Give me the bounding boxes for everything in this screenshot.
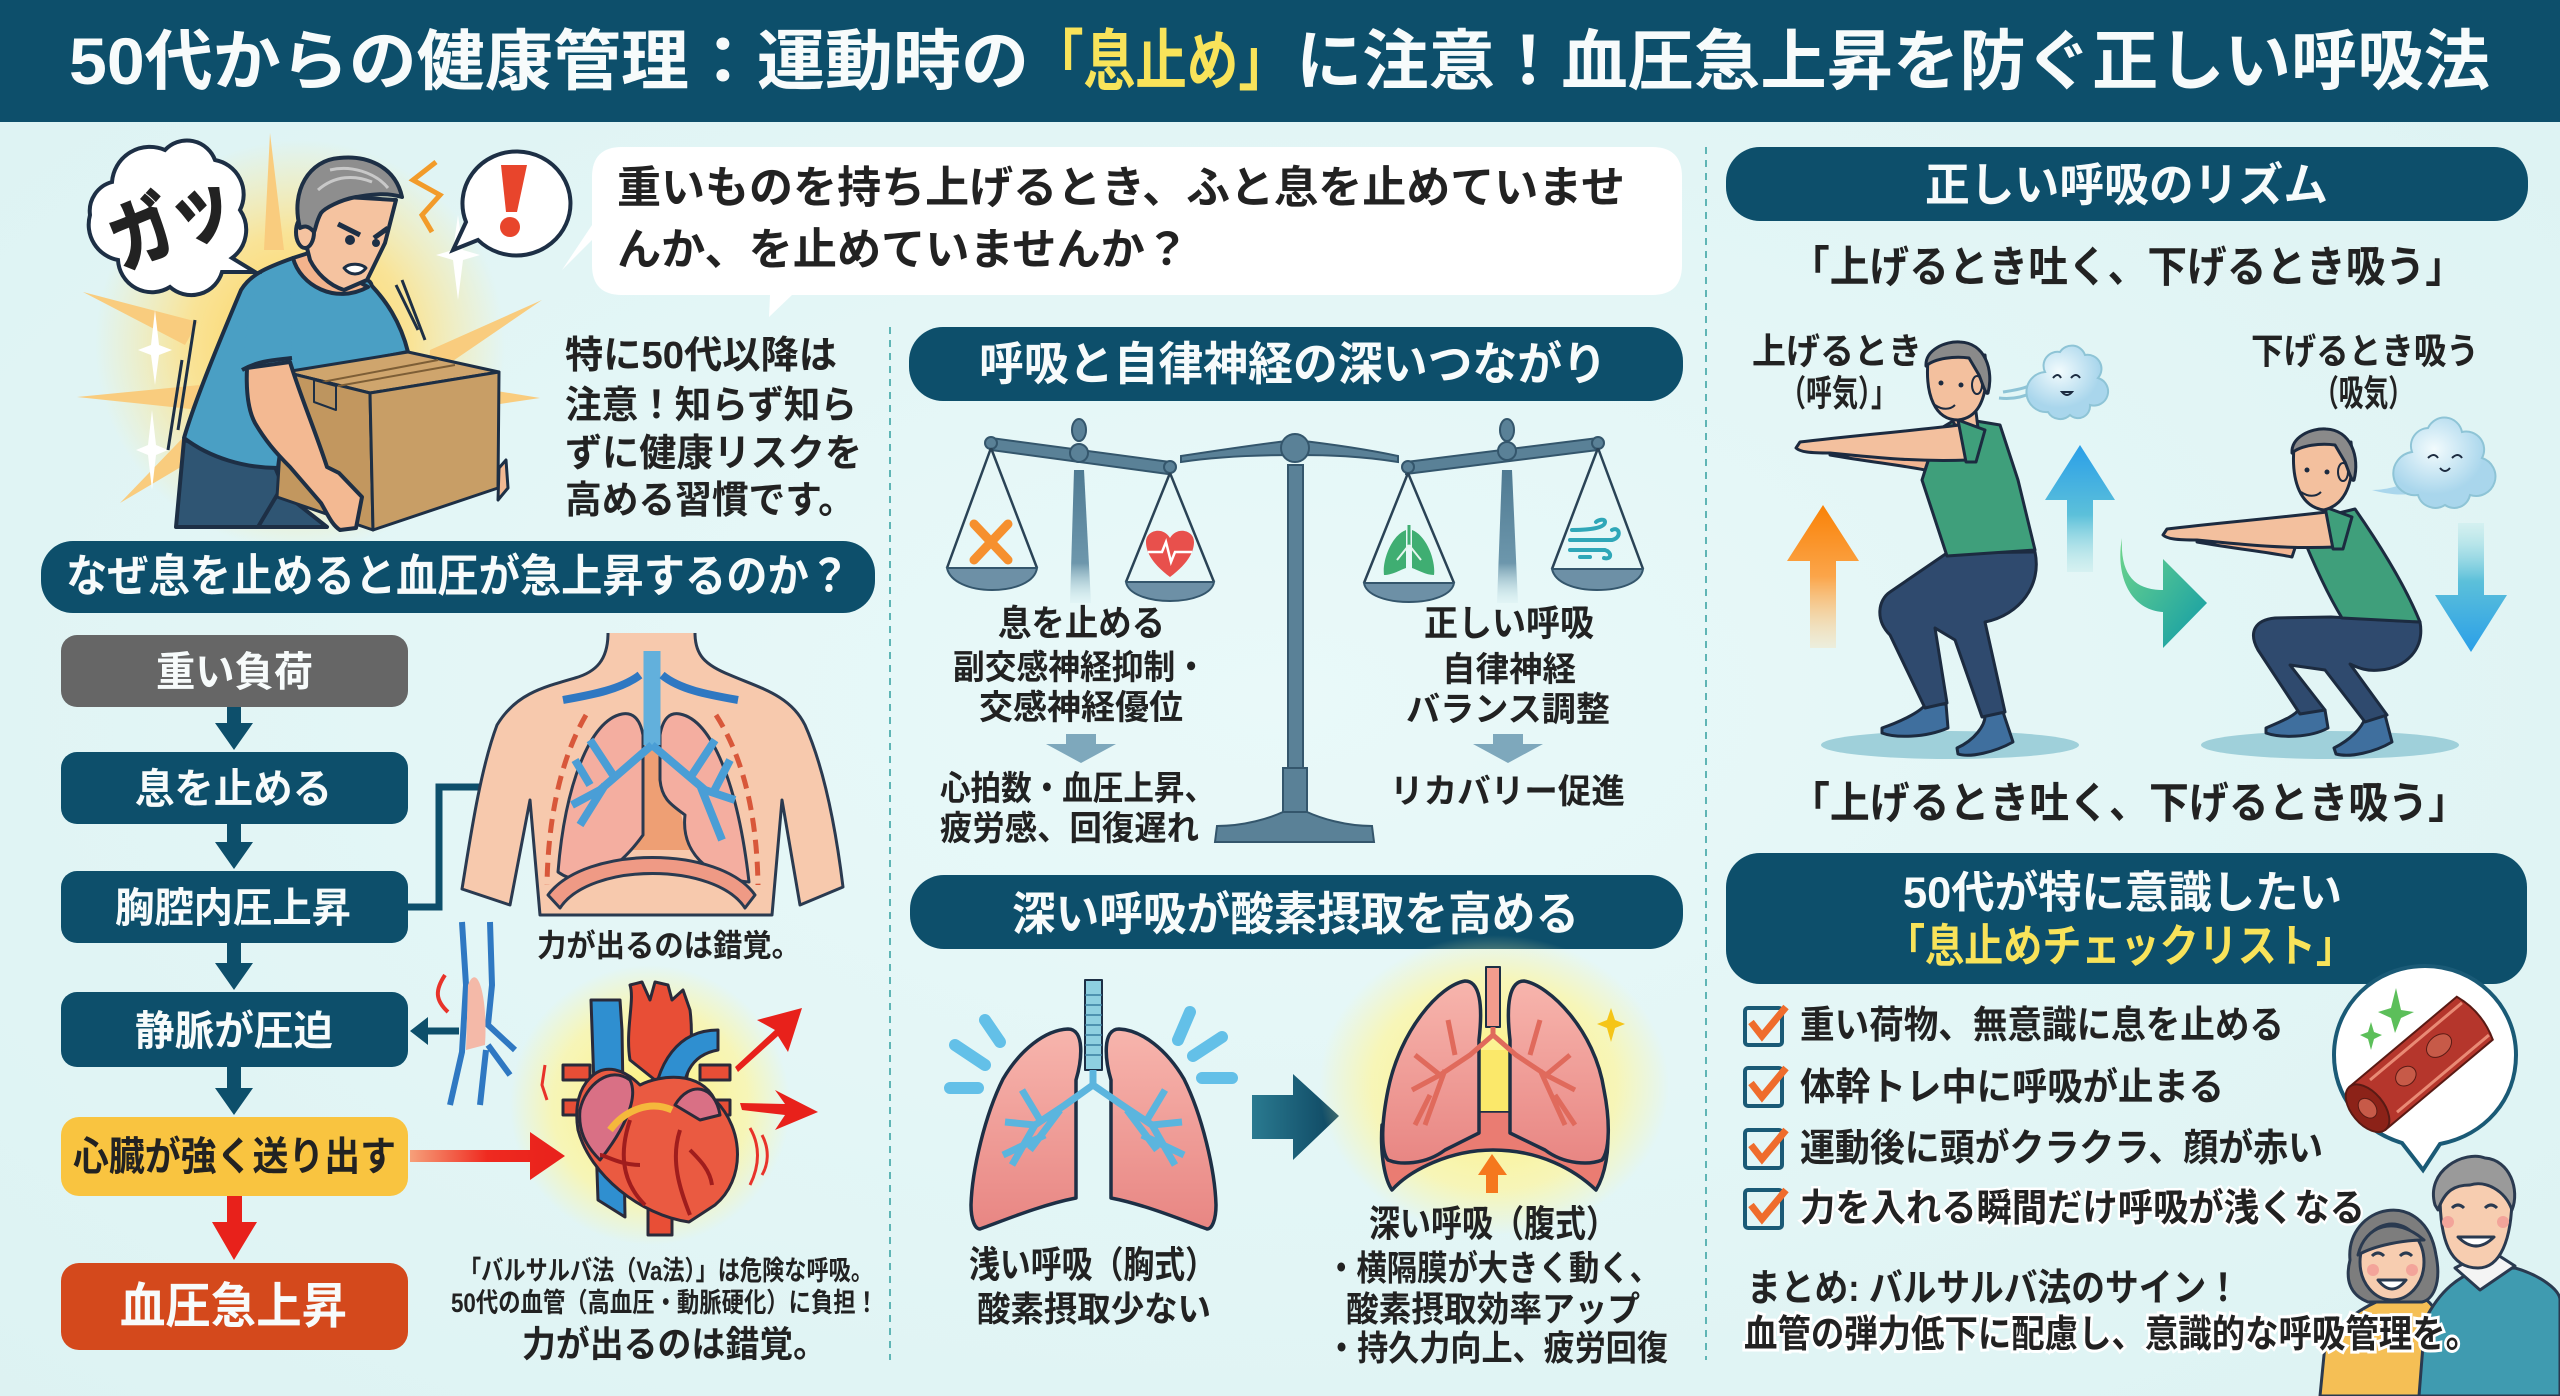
icon: inhale cloud	[2372, 418, 2495, 508]
flow step: heart pumps	[61, 1117, 408, 1196]
heading: breathing rhythm: 正しい呼吸のリズム	[1925, 159, 2328, 211]
arrow: red out right	[740, 1090, 818, 1130]
icon: man squatting, inhale	[2163, 429, 2421, 755]
text: intro note: 高める習慣です。	[565, 480, 855, 522]
flow step: hold breath: 息を止める	[135, 766, 332, 812]
divider right	[1705, 147, 1707, 1360]
text: intro note	[565, 335, 862, 522]
text: correct breathing effects	[1390, 602, 1625, 811]
arrow	[215, 824, 253, 869]
arrow: green curve	[2120, 538, 2207, 648]
text: inhale label	[2251, 330, 2479, 414]
text: valsalva warning: 50代の血管（高血圧・動脈硬化）に負担！	[451, 1288, 878, 1318]
title bar: 50代からの健康管理：運動時の	[69, 24, 1029, 98]
heading: checklist	[1726, 853, 2527, 984]
checklist item 4: 力を入れる瞬間だけ呼吸が浅くなる	[1800, 1188, 2365, 1230]
flow step: hold breath	[61, 752, 408, 824]
icon: floor shadows	[1821, 731, 2459, 759]
callout: exclamation bubble	[453, 152, 570, 256]
main pole	[1181, 434, 1398, 842]
callout: blood vessel bubble	[2334, 966, 2516, 1170]
text: holding breath effects: 副交感神経抑制・	[953, 649, 1207, 687]
icon: torso with lungs	[462, 633, 843, 915]
callout: question speech bubble	[562, 147, 1682, 317]
flow step: heart pumps: 心臓が強く送り出す	[73, 1135, 396, 1179]
icon: heart	[510, 965, 790, 1245]
checklist item 1: 重い荷物、無意識に息を止める	[1800, 1005, 2284, 1047]
text: shallow breathing	[969, 1244, 1216, 1330]
text: illusion caption: 力が出るのは錯覚。	[537, 928, 801, 964]
heading: deep breathing	[910, 875, 1683, 949]
icon: compressed vein	[450, 922, 515, 1105]
heading: breathing and autonomic nerves: 呼吸と自律神経の深いつながり	[979, 338, 1607, 390]
icon: heart with pulse	[1146, 531, 1194, 577]
flow step: vein compressed	[61, 992, 408, 1067]
arrow: vein to box	[410, 1017, 459, 1045]
text: correct breathing effects: リカバリー促進	[1390, 773, 1625, 811]
text: holding breath effects: 疲労感、回復遅れ	[940, 810, 1199, 848]
text: exhale label: （呼気）」	[1780, 372, 1897, 414]
callout: question speech bubble: んか、を止めていませんか？	[617, 226, 1189, 274]
text: inhale label: 下げるとき吸う	[2251, 330, 2479, 372]
icon: orange up arrow	[1478, 1154, 1507, 1193]
flow step: chest pressure	[61, 871, 408, 943]
arrow	[215, 707, 253, 750]
title bar	[0, 0, 2560, 122]
heading: why blood pressure rises	[41, 541, 875, 613]
text: holding breath effects: 心拍数・血圧上昇、	[940, 770, 1215, 808]
text: summary: 血管の弾力低下に配慮し、意識的な呼吸管理を。	[1744, 1314, 2479, 1356]
text: shallow breathing: 酸素摂取少ない	[977, 1290, 1211, 1330]
icon: artery	[2337, 994, 2497, 1140]
icon: impact lines	[168, 280, 425, 450]
text: valsalva warning: 力が出るのは錯覚。	[522, 1324, 827, 1364]
text: deep breathing: 深い呼吸（腹式）	[1369, 1204, 1617, 1244]
text: inhale label: （吸気）	[2314, 372, 2413, 414]
icon: heartbeat marks	[542, 1065, 767, 1185]
arrow	[212, 1196, 257, 1260]
text: deep breathing: 酸素摂取効率アップ	[1346, 1290, 1640, 1330]
text: holding breath effects: 息を止める	[998, 602, 1165, 644]
right sub-scale	[1364, 419, 1643, 603]
divider left	[889, 327, 891, 1360]
flow step: chest pressure: 胸腔内圧上昇	[115, 885, 351, 931]
text: shallow breathing: 浅い呼吸（胸式）	[969, 1244, 1216, 1286]
arrow: shallow to deep	[1252, 1074, 1339, 1160]
text: rhythm quote top: 「上げるとき吐く、下げるとき吸う」	[1790, 244, 2465, 292]
icon: green lungs	[1384, 525, 1434, 575]
icon: yellow sparkle	[1597, 1008, 1625, 1042]
icon: blue breath dashes	[950, 1012, 1232, 1088]
flowchart	[61, 635, 408, 1350]
arrow	[215, 943, 253, 990]
arrow: orange up	[1787, 505, 1859, 648]
callout: question speech bubble: 重いものを持ち上げるとき、ふと息を止めていませ	[617, 164, 1625, 212]
text: correct breathing effects: 自律神経	[1442, 651, 1576, 689]
text: deep breathing: ・横隔膜が大きく動く、	[1326, 1250, 1660, 1288]
flow step: blood pressure spike	[61, 1263, 408, 1350]
arrow: right down	[1473, 734, 1543, 763]
text: deep breathing	[1326, 1204, 1668, 1368]
icon: exhale cloud	[1999, 346, 2108, 419]
title bar: 「息止め」	[1032, 24, 1290, 98]
text: valsalva warning: 「バルサルバ法（Va法）」は危険な呼吸。	[459, 1256, 873, 1286]
icon: green sparkles	[2360, 988, 2414, 1050]
text: rhythm quote bottom: 「上げるとき吐く、下げるとき吸う」	[1790, 780, 2468, 828]
heading: deep breathing: 深い呼吸が酸素摂取を高める	[1012, 888, 1579, 940]
arrow: blue up	[2045, 445, 2115, 572]
text: exhale label: 上げるとき	[1752, 330, 1922, 372]
panel: intro hero	[77, 133, 1682, 550]
text: summary: まとめ: バルサルバ法のサイン！	[1747, 1268, 2240, 1310]
flow step: blood pressure spike: 血圧急上昇	[120, 1280, 347, 1334]
icon: shallow lungs	[950, 980, 1232, 1229]
left sub-scale	[947, 419, 1214, 603]
icon: glow burst	[77, 133, 542, 550]
arrow: blue down	[2435, 523, 2507, 652]
heading: why blood pressure rises: なぜ息を止めると血圧が急上昇するのか？	[66, 550, 850, 602]
flow step: vein compressed: 静脈が圧迫	[135, 1008, 333, 1054]
flow step: heavy load	[61, 635, 408, 707]
text: correct breathing effects: バランス調整	[1406, 691, 1610, 729]
text: summary	[1744, 1268, 2479, 1356]
arrow	[215, 1067, 253, 1115]
text: exhale label	[1752, 330, 1922, 414]
text: holding breath effects: 交感神経優位	[979, 689, 1183, 727]
heading: breathing rhythm	[1726, 147, 2528, 221]
icon: man lifting box	[176, 157, 508, 530]
heading: checklist: 「息止めチェックリスト」	[1886, 920, 2355, 972]
callout: gah bubble: ガッ	[97, 159, 247, 285]
flow step: heavy load: 重い負荷	[156, 649, 313, 695]
text: deep breathing: ・持久力向上、疲労回復	[1326, 1330, 1668, 1368]
text: holding breath effects	[940, 602, 1215, 848]
heading: checklist: 50代が特に意識したい	[1903, 868, 2342, 918]
heading: breathing and autonomic nerves	[909, 327, 1683, 401]
checklist	[1745, 1005, 2365, 1230]
text: intro note: 注意！知らず知ら	[565, 385, 857, 427]
text: intro note: 特に50代以降は	[565, 335, 837, 377]
text: correct breathing effects: 正しい呼吸	[1424, 602, 1594, 644]
arrow: to chest	[408, 774, 518, 907]
checklist item 2: 体幹トレ中に呼吸が止まる	[1800, 1067, 2224, 1109]
icon: orange cross	[974, 524, 1008, 560]
arrow: heart pumps red	[410, 1132, 565, 1180]
icon: deep lungs	[1319, 935, 1669, 1235]
icon: wind	[1570, 520, 1619, 558]
arrow: left down	[1046, 734, 1116, 763]
text: intro note: ずに健康リスクを	[565, 433, 862, 475]
icon: red pulse mark	[438, 975, 448, 1012]
chart: balance scale	[940, 419, 1643, 848]
icon: man standing squat, exhale	[1796, 342, 2036, 755]
arrow: red out up	[735, 1008, 802, 1072]
icon: smiling couple	[2320, 1156, 2560, 1396]
checklist item 3: 運動後に頭がクラクラ、顔が赤い	[1800, 1128, 2323, 1170]
text: valsalva warning	[451, 1256, 878, 1364]
icon: lightning	[413, 162, 440, 232]
title bar: に注意！血圧急上昇を防ぐ正しい呼吸法	[1296, 24, 2490, 98]
